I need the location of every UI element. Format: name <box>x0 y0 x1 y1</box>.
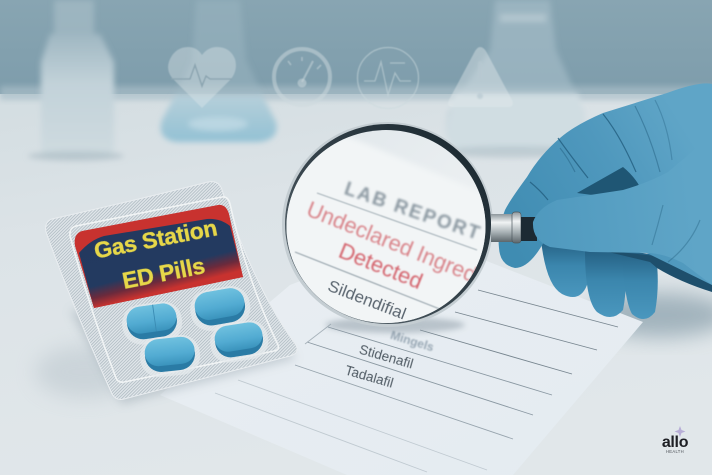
text: Mingels: Mingels <box>389 328 436 354</box>
text: LAB REPORT: LAB REPORT <box>342 179 484 245</box>
icon: gauge <box>274 49 330 105</box>
thumb <box>533 135 712 285</box>
vial, left <box>28 0 124 161</box>
handle ferrule <box>491 212 537 243</box>
gloved hand <box>491 83 712 319</box>
lab report paper <box>160 235 643 475</box>
blister shadow <box>70 310 296 404</box>
pills <box>120 283 271 379</box>
icon: warning triangle <box>448 47 513 107</box>
text: Stidenafil: Stidenafil <box>357 342 415 372</box>
flask, right <box>442 0 585 158</box>
text: Gas Station: Gas Station <box>92 215 219 264</box>
back of hand <box>499 83 712 285</box>
logo wordmark: allo <box>662 434 689 451</box>
icon: pulse circle <box>358 48 418 108</box>
lens glass <box>286 130 486 323</box>
magnifying glass <box>282 122 492 336</box>
pill 4 <box>208 318 271 365</box>
paper rule lines <box>215 290 618 472</box>
magnified report <box>286 136 486 323</box>
logo: allo health <box>662 426 689 454</box>
foil tray <box>46 182 297 399</box>
table shadows <box>35 346 135 398</box>
lens rim <box>282 122 493 327</box>
glove creases <box>530 100 700 262</box>
text: ED Pills: ED Pills <box>120 252 207 294</box>
label: red and navy band <box>75 205 243 308</box>
lower fingers <box>541 240 712 319</box>
text: Detected: Detected <box>335 238 426 294</box>
text: Sildendifial: Sildendifial <box>325 276 409 323</box>
inner panel <box>70 197 278 382</box>
pill 1 <box>120 299 185 347</box>
lens shadow <box>325 317 465 333</box>
flask, centre left <box>161 0 277 142</box>
logo subtitle: HEALTH <box>666 449 684 454</box>
text: Undeclared Ingredients: Undeclared Ingredients <box>303 196 523 305</box>
floating health icons <box>168 47 513 108</box>
palm shade <box>577 167 640 196</box>
logo mark <box>674 426 686 437</box>
icon: heart with pulse <box>168 47 236 108</box>
pill 3 <box>138 333 202 379</box>
pill 2 <box>187 283 253 334</box>
blister pack <box>46 182 297 404</box>
text: Tadalafil: Tadalafil <box>343 363 395 391</box>
